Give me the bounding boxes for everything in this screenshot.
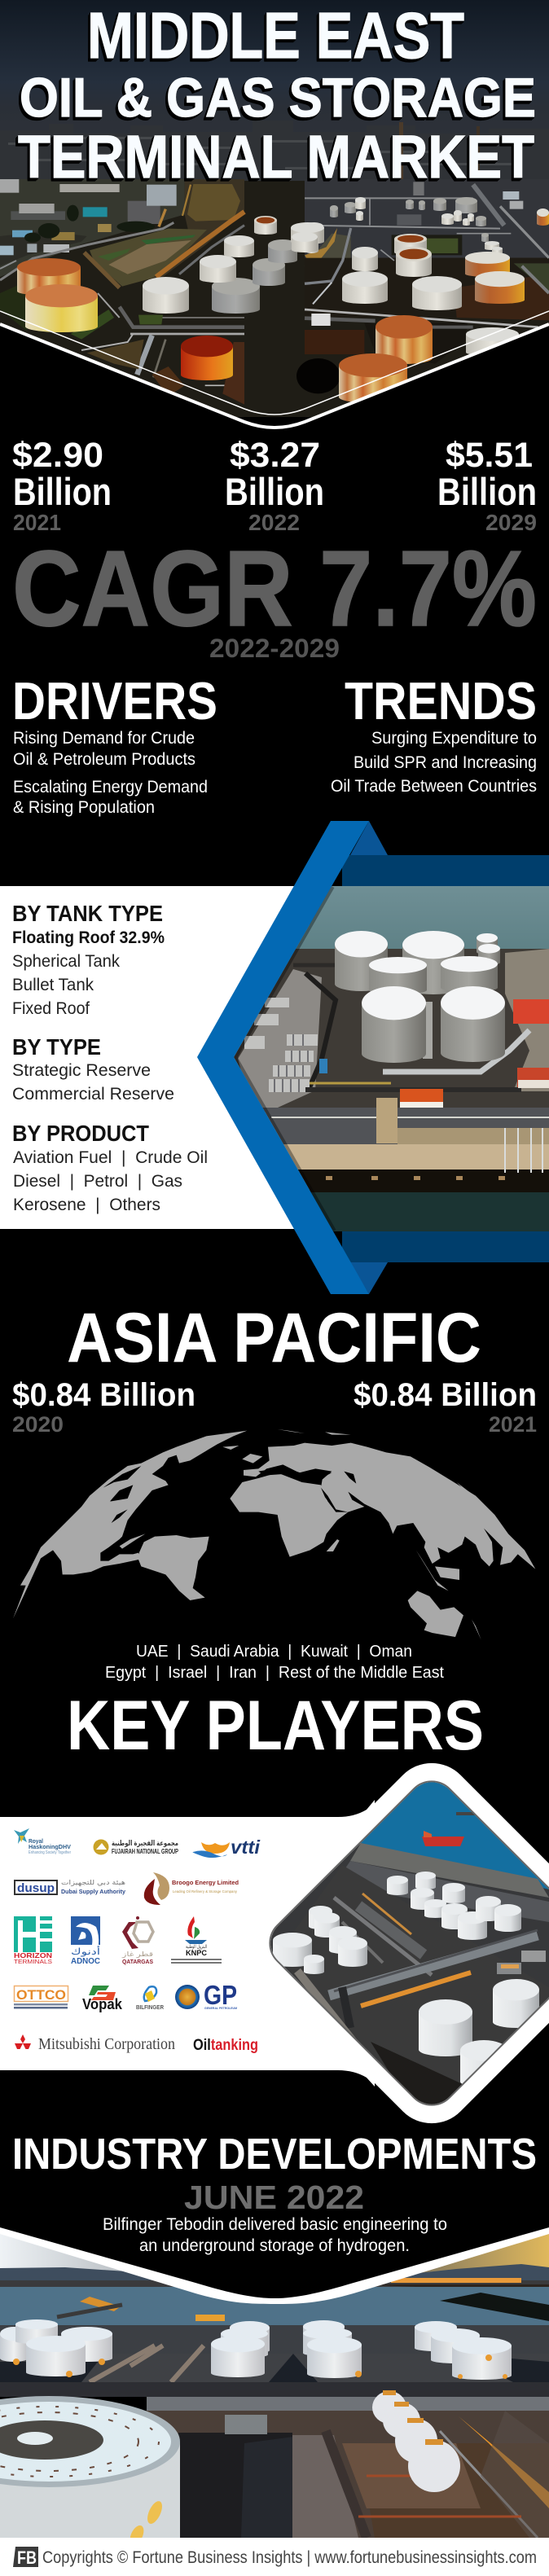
trends: Build SPR and Increasing [354, 753, 537, 772]
world map [13, 1429, 535, 1639]
heading: Key Players: KEY PLAYERS [67, 1687, 484, 1765]
countries list: UAE | Saudi Arabia | Kuwait | Oman [136, 1643, 412, 1661]
logo: KNPC: البترول الوطنية [186, 1944, 207, 1950]
stat: 2021 value: 2021 [13, 510, 61, 535]
segments: by tank type: Bullet Tank [12, 976, 94, 994]
logo: OTTCO [14, 1986, 68, 2008]
segments: by type: BY TYPE [12, 1034, 101, 1060]
stat: 2029 value: $5.51 [446, 436, 533, 475]
logo: Horizon Terminals: TERMINALS [14, 1959, 52, 1965]
segments: by tank type: Spherical Tank [12, 952, 120, 971]
logo: VTTI [192, 1837, 261, 1858]
logo: Fujairah National Group [93, 1839, 178, 1855]
logo: Bilfinger: BILFINGER [136, 2003, 164, 2011]
segments: by type: Commercial Reserve [12, 1085, 174, 1104]
panel: segments white background [0, 886, 310, 1229]
development description: an underground storage of hydrogen. [139, 2236, 410, 2255]
logo: Qatargas: QATARGAS [122, 1958, 153, 1965]
photo outline [260, 1771, 549, 2115]
logo: Oiltanking: Oiltanking [193, 2037, 258, 2054]
logo: DUSUP [15, 1879, 126, 1895]
regional value 2020: 2020 [12, 1412, 64, 1437]
logo: Fujairah National Group: FUJAIRAH NATIONAL GROUP [112, 1848, 178, 1855]
logo: Royal HaskoningDHV: Royal [29, 1837, 43, 1845]
logo: ADNOC [71, 1916, 100, 1966]
photo: terminal with six tanks [228, 886, 549, 1233]
segments: by tank type [12, 901, 165, 1018]
development description: Bilfinger Tebodin delivered basic engineering to [103, 2215, 447, 2234]
title: MIDDLE EAST [87, 0, 464, 72]
logo: ADNOC: ADNOC [71, 1957, 100, 1966]
logo: ADNOC: أدنوك [71, 1946, 100, 1957]
drivers: Oil & Petroleum Products [13, 750, 195, 769]
regional value 2020 [12, 1377, 195, 1437]
white diamond frame [235, 1746, 549, 2140]
regional value 2021: $0.84 Billion [354, 1377, 537, 1413]
logo: Brooge Energy [144, 1872, 239, 1905]
hero photo: tank farm [0, 0, 549, 417]
drivers: Escalating Energy Demand [13, 778, 208, 796]
blue chevron [197, 821, 369, 1294]
regional value 2021: 2021 [489, 1412, 537, 1437]
logo: Qatargas: قطر غاز [121, 1951, 153, 1958]
logo: Horizon Terminals: HORIZON [14, 1951, 52, 1959]
segments: by product: BY PRODUCT [12, 1121, 149, 1146]
drivers: & Rising Population [13, 798, 155, 817]
logo: Royal HaskoningDHV: HaskoningDHV [29, 1843, 71, 1850]
logo: Brooge Energy: Broogo Energy Limited [172, 1879, 239, 1886]
segments: by tank type: Fixed Roof [12, 999, 90, 1018]
logo: VTTI: vtti [231, 1837, 261, 1858]
stat: 2022 value: 2022 [248, 510, 300, 535]
logo: KNPC [171, 1916, 222, 1964]
stat: 2021 value: Billion [13, 470, 112, 513]
stat: 2029 value [437, 436, 537, 535]
stat: 2021 value: $2.90 [12, 436, 103, 475]
logo: DUSUP: Dubai Supply Authority [61, 1888, 126, 1895]
segments: by type: Strategic Reserve [12, 1061, 151, 1080]
segments: by product [12, 1121, 208, 1214]
logo: Qatargas [121, 1916, 153, 1965]
segments: by tank type: Floating Roof 32.9% [12, 928, 165, 947]
stat: 2022 value: $3.27 [230, 436, 320, 475]
logo: Vopak: Vopak [82, 1996, 123, 2012]
logo: GP [175, 1980, 238, 2010]
stat: 2029 value: 2029 [485, 510, 537, 535]
stat: 2022 value: Billion [225, 470, 324, 513]
logo: KNPC: KNPC [186, 1949, 207, 1957]
segments: by product: Kerosene | Others [13, 1196, 160, 1214]
footer bar [0, 2538, 549, 2576]
drivers: DRIVERS [12, 671, 217, 731]
logo: Mitsubishi Corporation: Mitsubishi Corporation [38, 2035, 175, 2053]
hero frame: white V lines [0, 311, 549, 428]
CAGR figure: 2022-2029 [209, 634, 340, 663]
trends: Oil Trade Between Countries [331, 777, 537, 796]
logo: Brooge Energy: Leading Oil Refinery & Storage Company [173, 1889, 238, 1894]
development description [103, 2215, 447, 2255]
logo: GP: GP [204, 1980, 237, 2010]
countries list [105, 1643, 444, 1682]
logo: DUSUP: هيئة دبي للتجهيزات [61, 1879, 125, 1886]
stat: 2022 value [225, 436, 324, 535]
logo: DUSUP: dusup [17, 1881, 55, 1895]
development date: JUNE 2022 [184, 2179, 364, 2216]
bottom frame: white curve [0, 2227, 549, 2304]
regional value 2020: $0.84 Billion [12, 1377, 195, 1413]
trends: Surging Expenditure to [371, 729, 537, 748]
panel: dark blue bands [342, 821, 549, 1294]
logo: Fujairah National Group: مجموعة الفجيرة الوطنية [112, 1839, 178, 1848]
trends [331, 671, 537, 796]
logo: Horizon Terminals [14, 1916, 52, 1965]
countries list: Egypt | Israel | Iran | Rest of the Middle East [105, 1664, 444, 1682]
logo: Royal HaskoningDHV: Enhancing Society Together [29, 1850, 71, 1855]
panel: key players white band [0, 1800, 375, 2087]
segments: by product: Diesel | Petrol | Gas [13, 1172, 182, 1191]
segments: by type [12, 1034, 174, 1104]
photo: refinery diamond [261, 1775, 549, 2117]
regional value 2021 [354, 1377, 537, 1437]
drivers: Rising Demand for Crude [13, 729, 195, 748]
segments: by product: Aviation Fuel | Crude Oil [13, 1148, 208, 1167]
stat: 2021 value [12, 436, 112, 535]
logo: Vopak [82, 1986, 123, 2012]
photo: night terminal [0, 2227, 549, 2549]
logo: OTTCO: OTTCO [16, 1987, 66, 2003]
drivers [12, 671, 217, 817]
heading: Asia Pacific: ASIA PACIFIC [67, 1299, 481, 1377]
logo: GP: GENERAL PETROLEUM [204, 2006, 238, 2010]
footer logo: FB [17, 2547, 37, 2568]
logo: Royal HaskoningDHV [14, 1828, 71, 1855]
logo: Bilfinger [136, 1986, 164, 2011]
title [18, 0, 536, 191]
segments: by tank type: BY TANK TYPE [12, 901, 163, 926]
